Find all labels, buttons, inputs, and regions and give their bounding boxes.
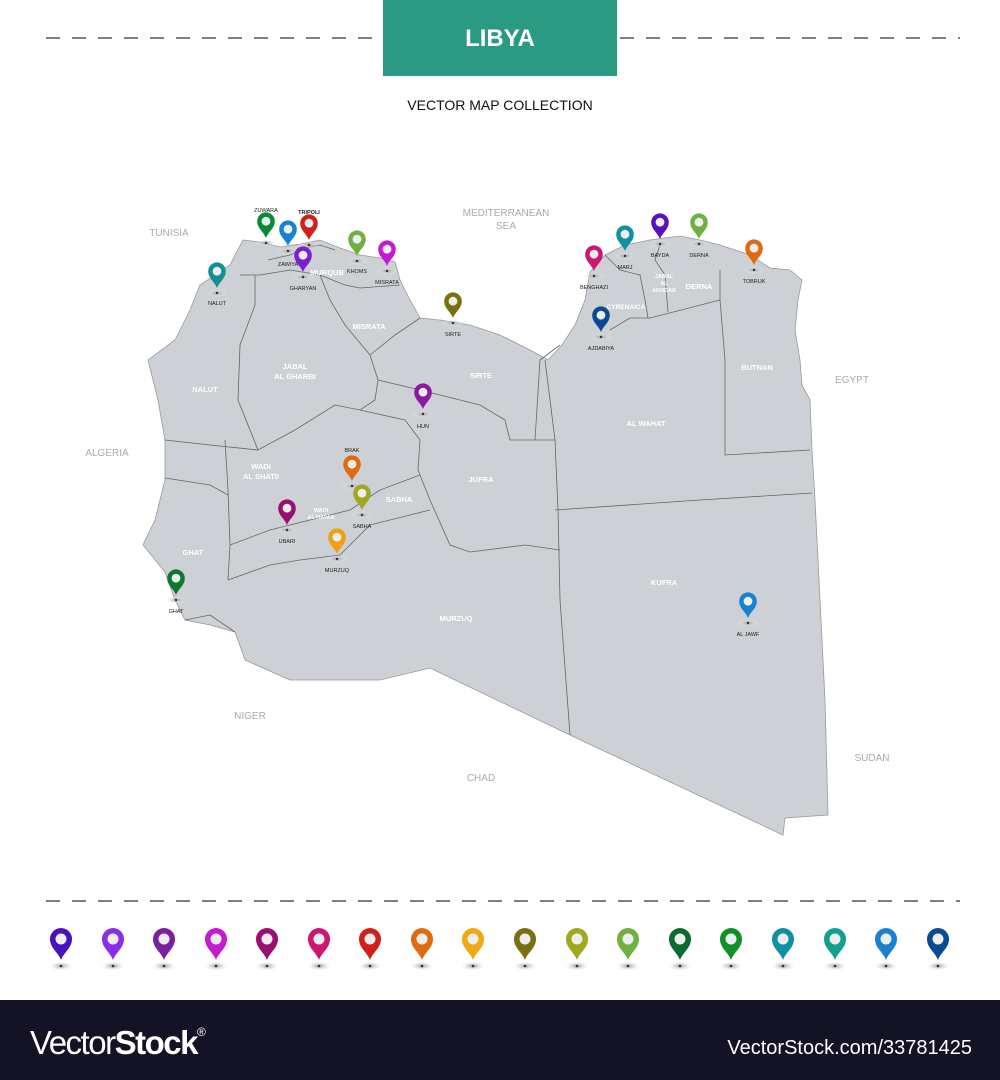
map pins with city labels: ZAWIYA [278, 262, 299, 268]
region labels: WADI [251, 462, 271, 471]
region labels: AL GHARBI [274, 372, 316, 381]
subtitle: VECTOR MAP COLLECTION [407, 97, 593, 113]
region labels [183, 268, 773, 623]
neighbor labels [85, 208, 890, 784]
region labels: WADI [314, 508, 329, 514]
map pins with city labels [165, 208, 766, 638]
map pins with city labels: TRIPOLI [298, 210, 320, 216]
neighbor labels: CHAD [467, 773, 495, 784]
map pins with city labels: UBARI [279, 539, 296, 545]
map pins with city labels: NALUT [208, 301, 227, 307]
neighbor labels: SEA [496, 221, 516, 232]
map pins with city labels: AJDABIYA [588, 346, 614, 352]
title banner: LIBYA [465, 25, 535, 52]
region labels: MISRATA [352, 322, 386, 331]
region labels: BUTNAN [741, 363, 773, 372]
map pins with city labels: BENGHAZI [580, 285, 609, 291]
region labels: AL WAHAT [627, 419, 666, 428]
map pins with city labels: ZUWARA [254, 208, 278, 214]
region labels: JUFRA [468, 475, 494, 484]
neighbor labels: MEDITERRANEAN [463, 208, 549, 219]
map: Libya [143, 236, 828, 835]
neighbor labels: SUDAN [854, 753, 890, 764]
region labels: DERNA [686, 282, 713, 291]
map pins with city labels: SIRTE [445, 332, 461, 338]
region labels: GHAT [183, 548, 204, 557]
region labels: AL [660, 281, 668, 287]
map pins with city labels: BAYDA [651, 253, 669, 259]
map pins with city labels: SABHA [353, 524, 372, 530]
map pins with city labels: AL JAWF [737, 632, 760, 638]
map pins with city labels: DERNA [689, 253, 709, 259]
footer bar: ® [197, 1025, 206, 1039]
footer bar: VectorStock [30, 1024, 197, 1061]
region labels: JABAL [655, 274, 674, 280]
region labels: NALUT [192, 385, 218, 394]
map pins with city labels: GHAT [169, 609, 184, 615]
neighbor labels: TUNISIA [149, 228, 189, 239]
map pins with city labels: BRAK [345, 448, 360, 454]
bottom dashed line [46, 900, 960, 902]
legend pin row [48, 928, 951, 971]
neighbor labels: EGYPT [835, 375, 869, 386]
map pins with city labels: GHARYAN [290, 286, 316, 292]
neighbor labels: ALGERIA [85, 448, 129, 459]
region labels: CYRENAICA [607, 304, 646, 311]
neighbor labels: NIGER [234, 711, 266, 722]
footer bar: VectorStock.com/33781425 [727, 1037, 972, 1059]
map pins with city labels: MURZUQ [325, 568, 350, 574]
header dashed line [46, 37, 960, 39]
footer bar [0, 1000, 1000, 1080]
region labels: MURQUB [310, 268, 344, 277]
region labels: AKHDAR [652, 288, 676, 294]
region labels: AL SHATII [243, 472, 279, 481]
region labels: SIRTE [470, 371, 492, 380]
map pins with city labels: HUN [417, 424, 429, 430]
region labels: SABHA [386, 495, 413, 504]
map pins with city labels: MARJ [618, 265, 633, 271]
map pins with city labels: TOBRUK [743, 279, 766, 285]
map pins with city labels: KHOMS [347, 269, 367, 275]
title banner [383, 0, 617, 76]
region labels: JABAL [282, 362, 308, 371]
map pins with city labels: MISRATA [375, 280, 399, 286]
region labels: MURZUQ [440, 614, 473, 623]
region labels: AL HAYAA [307, 515, 335, 521]
region labels: KUFRA [651, 578, 678, 587]
